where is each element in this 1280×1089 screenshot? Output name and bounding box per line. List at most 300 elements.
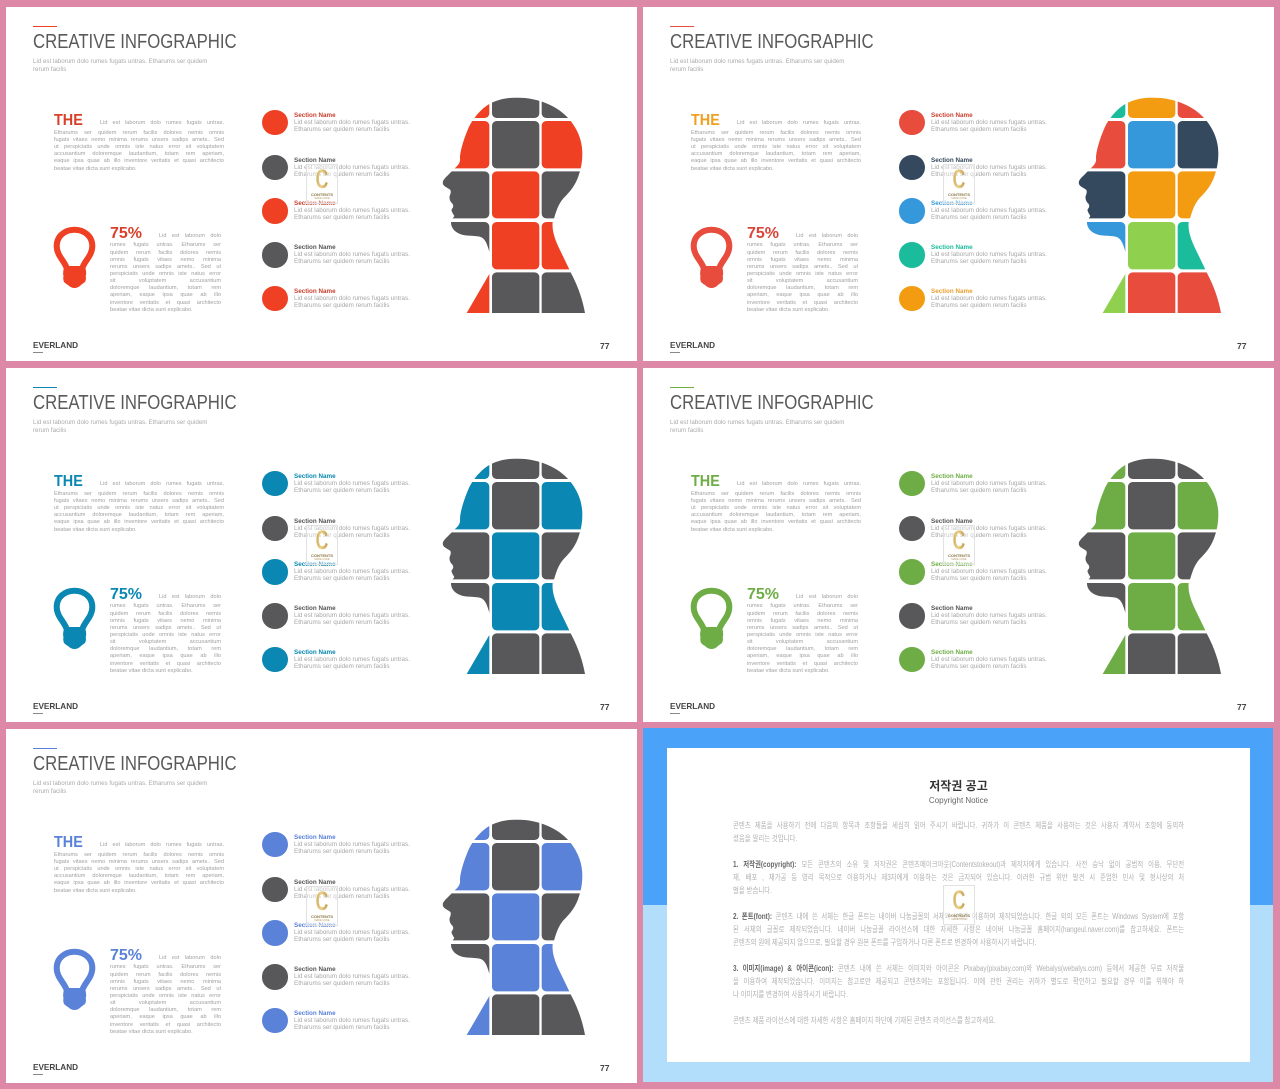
section text 3: Lid est laborum dolo rumes fugats untras.	[931, 207, 1047, 214]
title: CREATIVE INFOGRAPHIC	[670, 392, 874, 414]
section text 3: Etharums ser quidem rerum facilis	[931, 214, 1027, 221]
subtitle	[33, 418, 207, 434]
heading: copyright title: 저작권 공고	[929, 779, 988, 793]
heading: THE: THE	[54, 112, 83, 129]
head mosaic	[442, 458, 585, 674]
watermark: C	[953, 525, 965, 555]
text block: intro: eaque ipsa quae ab illo inventore veritatis et quasi architecto	[54, 880, 224, 886]
subtitle: Lid est laborum dolo rumes fugats untras. Etharums ser quidem	[670, 418, 844, 426]
section text 2: Etharums ser quidem rerum facilis	[294, 532, 390, 539]
section text 5: Lid est laborum dolo rumes fugats untras.	[294, 656, 410, 663]
section text 4	[294, 244, 410, 265]
section text 2: Section Name	[294, 878, 336, 886]
subtitle: Lid est laborum dolo rumes fugats untras. Etharums ser quidem	[670, 58, 844, 64]
watermark	[306, 164, 338, 204]
stat: 75%: 75%	[747, 586, 779, 603]
section text 3: Section Name	[294, 200, 336, 207]
section circle 1	[899, 471, 925, 496]
section text 1: Etharums ser quidem rerum facilis	[931, 126, 1027, 133]
text block: stat description: Lid est laborum dolo	[796, 594, 858, 600]
text block: intro: ut perspiciatis unde omnis iste natus error sit voluptatem	[691, 505, 861, 511]
section text 1	[294, 834, 424, 855]
title: CREATIVE INFOGRAPHIC	[33, 753, 237, 775]
text block: intro: beatae vitae dicta sunt explicabo.	[691, 527, 774, 533]
heading: copyright subtitle: Copyright Notice	[929, 796, 988, 805]
text block: stat description: quidem rerum facilis dolores nemis	[747, 611, 858, 617]
page number: 77	[600, 341, 610, 351]
panel: copyright notice card	[667, 748, 1250, 1062]
section text 3	[931, 200, 1047, 221]
text block: intro: accusantium doloremque laudantium, totam rem aperiam,	[54, 512, 224, 518]
section text 3: Section Name	[931, 561, 973, 568]
section text 4: Section Name	[294, 244, 336, 251]
subtitle: rerum facilis	[670, 426, 703, 434]
text block: intro: Etharums ser quidem rerum facilis dolores nemis omnis	[54, 491, 224, 497]
section text 5: Etharums ser quidem rerum facilis	[931, 302, 1027, 309]
section text 3: Lid est laborum dolo rumes fugats untras.	[294, 929, 410, 936]
text block: intro: eaque ipsa quae ab illo inventore veritatis et quasi architecto	[54, 158, 224, 164]
watermark: CONTENTS	[948, 553, 970, 558]
section text 1: Lid est laborum dolo rumes fugats untras.	[931, 119, 1047, 126]
text block: intro: eaque ipsa quae ab illo inventore veritatis et quasi architecto	[691, 519, 861, 525]
section text 2: Lid est laborum dolo rumes fugats untras.	[294, 525, 410, 532]
section text 5: Etharums ser quidem rerum facilis	[294, 302, 390, 309]
text block: copyright body: 된 서체의 글꼴로 제작되었습니다. 네이버 나눔글꼴 라이선스에 대한 자세한 사항은 네이버 나눔글꼴 홈페이지(hangeul.naver.com)를 참고하세요. 폰트는	[733, 925, 1184, 934]
text block: intro	[54, 842, 224, 894]
text block: stat description: rerums unsers sadips amets.. Sed ut	[110, 986, 221, 992]
text block: stat description: aperiam, eaque ipsa quae ab illo	[747, 292, 858, 298]
footer brand: EVERLAND	[670, 341, 715, 350]
section text 4	[294, 605, 410, 626]
text block: stat description: omnis fugats vitaes nemo minima	[747, 618, 858, 624]
section text 5	[294, 288, 410, 309]
subtitle: rerum facilis	[33, 66, 66, 72]
text block: stat description: doloremque laudantium, totam rem	[110, 1007, 221, 1013]
text block: stat description: perspiciatis unde omnis iste natus error	[747, 632, 858, 638]
text block: intro: beatae vitae dicta sunt explicabo.	[54, 166, 137, 172]
section text 5: Section Name	[294, 288, 336, 295]
text block: intro: ut perspiciatis unde omnis iste natus error sit voluptatem	[54, 144, 224, 150]
section text 3: Etharums ser quidem rerum facilis	[294, 214, 390, 221]
watermark: MADE CODE	[314, 197, 330, 200]
section text 1: Etharums ser quidem rerum facilis	[294, 126, 390, 133]
panel: blue slide	[6, 729, 637, 1083]
text block: stat description: sit voluptatem accusantium	[747, 639, 858, 645]
text block: stat description: quidem rerum facilis dolores nemis	[110, 972, 221, 978]
section text 3: Etharums ser quidem rerum facilis	[931, 575, 1027, 582]
text block: stat description: inventore veritatis et quasi architecto	[747, 661, 858, 667]
section text 3: Section Name	[294, 561, 336, 568]
footer brand: EVERLAND	[33, 341, 78, 350]
section text 1: Etharums ser quidem rerum facilis	[294, 848, 390, 855]
text block: intro: ut perspiciatis unde omnis iste natus error sit voluptatem	[691, 144, 861, 150]
section text 1: Section Name	[931, 112, 973, 118]
section text 1: Etharums ser quidem rerum facilis	[294, 487, 390, 494]
section text 2: Etharums ser quidem rerum facilis	[294, 171, 390, 178]
section circle 2	[899, 516, 925, 541]
text block: intro: fugats vitaes nemo minima rerums unsers sadips amets.. Sed	[54, 137, 224, 143]
text block: intro: accusantium doloremque laudantium, totam rem aperiam,	[54, 151, 224, 157]
section text 5	[931, 649, 1047, 670]
watermark: CONTENTS	[311, 192, 333, 197]
text block: intro: Etharums ser quidem rerum facilis dolores nemis omnis	[691, 491, 861, 497]
text block: stat description: Lid est laborum dolo	[159, 594, 221, 600]
watermark	[306, 525, 338, 565]
section text 2: Section Name	[931, 518, 973, 524]
section text 5: Section Name	[294, 649, 336, 656]
section text 4: Lid est laborum dolo rumes fugats untras.	[294, 973, 410, 980]
section text 3: Lid est laborum dolo rumes fugats untras.	[294, 568, 410, 575]
text block: stat description: inventore veritatis et quasi architecto	[110, 661, 221, 667]
section circle 1	[262, 110, 288, 135]
text block: copyright body: 셨음을 알리는 것입니다.	[733, 834, 797, 843]
section text 2: Lid est laborum dolo rumes fugats untras.	[294, 164, 410, 171]
watermark: MADE CODE	[314, 558, 330, 561]
watermark: C	[953, 885, 965, 915]
text block: stat description: beatae vitae dicta sunt explicabo.	[110, 1029, 193, 1035]
section text 4	[931, 605, 1047, 626]
text block: stat description: perspiciatis unde omnis iste natus error	[110, 632, 221, 638]
section text 4: Lid est laborum dolo rumes fugats untras.	[294, 612, 410, 619]
text block: stat description: inventore veritatis et quasi architecto	[110, 1022, 221, 1028]
section text 1	[931, 472, 1047, 494]
text block: stat description: rumes fugats untras. Etharums ser	[110, 964, 221, 970]
section circle 5	[262, 286, 288, 311]
text block: stat description: Lid est laborum dolo	[159, 954, 221, 960]
section text 1	[294, 112, 410, 133]
text block: stat description: perspiciatis unde omnis iste natus error	[110, 271, 221, 277]
section circle 2	[262, 155, 288, 180]
section circle 5	[899, 286, 925, 311]
watermark	[943, 164, 975, 204]
watermark: C	[316, 886, 328, 916]
section text 4: Section Name	[294, 966, 336, 973]
text block: stat description: rerums unsers sadips amets.. Sed ut	[110, 625, 221, 631]
text block: stat description: Lid est laborum dolo	[159, 232, 221, 238]
text block: intro	[54, 120, 224, 172]
section text 4: Lid est laborum dolo rumes fugats untras.	[931, 251, 1047, 258]
text block: stat description: aperiam, eaque ipsa quae ab illo	[110, 1014, 221, 1020]
subtitle	[33, 58, 207, 72]
text block: intro: Etharums ser quidem rerum facilis dolores nemis omnis	[54, 130, 224, 136]
watermark: CONTENTS	[311, 553, 333, 558]
section text 3: Section Name	[931, 200, 973, 207]
footer brand: EVERLAND	[33, 702, 78, 711]
section circle 5	[899, 647, 925, 672]
text block: copyright body	[733, 820, 1184, 1028]
subtitle: rerum facilis	[33, 426, 66, 434]
text block: stat description: quidem rerum facilis dolores nemis	[747, 250, 858, 256]
text block: stat description: doloremque laudantium, totam rem	[747, 285, 858, 291]
text block: stat description	[747, 594, 858, 674]
panel: red slide	[6, 7, 637, 361]
head mosaic	[1078, 98, 1221, 313]
text block: stat description: omnis fugats vitaes nemo minima	[110, 257, 221, 263]
text block: stat description: rumes fugats untras. Etharums ser	[747, 242, 858, 248]
section circle 5	[262, 1008, 288, 1033]
text block: stat description: inventore veritatis et quasi architecto	[747, 300, 858, 306]
icon: light bulb	[54, 588, 96, 649]
footer brand: EVERLAND	[670, 702, 715, 711]
text block: copyright body: 나 이미지를 변경하여 사용하시기 바랍니다.	[733, 990, 848, 999]
page number: 77	[1237, 341, 1247, 351]
section text 1: Section Name	[294, 834, 336, 840]
watermark: CONTENTS	[948, 192, 970, 197]
text block: stat description: omnis fugats vitaes nemo minima	[110, 979, 221, 985]
section circle 4	[899, 242, 925, 268]
section text 2: Lid est laborum dolo rumes fugats untras.	[294, 886, 410, 893]
title: CREATIVE INFOGRAPHIC	[670, 31, 874, 53]
text block: intro: Etharums ser quidem rerum facilis dolores nemis omnis	[54, 852, 224, 858]
panel: multicolor slide	[643, 7, 1274, 361]
text block: stat description	[110, 232, 221, 313]
section text 5: Section Name	[294, 1010, 336, 1017]
subtitle	[33, 780, 207, 794]
icon: light bulb	[690, 226, 732, 288]
heading: THE: THE	[54, 473, 83, 490]
text block: stat description: rerums unsers sadips amets.. Sed ut	[747, 264, 858, 270]
section circle 4	[262, 964, 288, 990]
section text 2	[931, 156, 1047, 178]
section circle 3	[262, 920, 288, 946]
watermark: MADE CODE	[951, 918, 967, 921]
section text 5: Section Name	[931, 288, 973, 295]
section text 4: Section Name	[294, 605, 336, 612]
text block: intro: Lid est laborum dolo rumes fugats untras.	[100, 120, 224, 126]
section text 5: Lid est laborum dolo rumes fugats untras.	[931, 295, 1047, 302]
section text 3: Section Name	[294, 922, 336, 929]
section text 3	[294, 561, 410, 582]
section circle 1	[899, 110, 925, 135]
section text 4: Etharums ser quidem rerum facilis	[294, 980, 390, 987]
text block: intro: ut perspiciatis unde omnis iste natus error sit voluptatem	[54, 866, 224, 872]
text block: stat description: rumes fugats untras. Etharums ser	[110, 242, 221, 248]
watermark: MADE CODE	[314, 919, 330, 922]
section text 5: Etharums ser quidem rerum facilis	[294, 1024, 390, 1031]
text block: stat description: sit voluptatem accusantium	[747, 278, 858, 284]
watermark: CONTENTS	[948, 913, 970, 918]
text block: intro	[691, 120, 861, 172]
section text 5: Section Name	[931, 649, 973, 656]
text block: stat description: perspiciatis unde omnis iste natus error	[110, 993, 221, 999]
section text 4: Section Name	[931, 605, 973, 612]
subtitle	[670, 418, 844, 434]
section text 5	[931, 288, 1047, 309]
title: CREATIVE INFOGRAPHIC	[33, 392, 237, 414]
icon: light bulb	[690, 588, 732, 649]
watermark: CONTENTS	[311, 914, 333, 919]
subtitle: Lid est laborum dolo rumes fugats untras. Etharums ser quidem	[33, 58, 207, 64]
text block: stat description: sit voluptatem accusantium	[110, 1000, 221, 1006]
watermark: MADE CODE	[951, 197, 967, 200]
subtitle: Lid est laborum dolo rumes fugats untras. Etharums ser quidem	[33, 780, 207, 786]
text block: stat description: sit voluptatem accusantium	[110, 639, 221, 645]
stat: 75%: 75%	[110, 225, 142, 242]
page number: 77	[1237, 702, 1247, 712]
text block: intro: eaque ipsa quae ab illo inventore veritatis et quasi architecto	[691, 158, 861, 164]
text block: intro: beatae vitae dicta sunt explicabo.	[54, 888, 137, 894]
head mosaic	[442, 820, 585, 1035]
watermark	[943, 885, 975, 925]
section circle 3	[899, 559, 925, 585]
section text 1: Etharums ser quidem rerum facilis	[931, 487, 1027, 494]
subtitle: rerum facilis	[33, 788, 66, 794]
section circle 3	[262, 559, 288, 585]
section text 4: Etharums ser quidem rerum facilis	[931, 619, 1027, 626]
text block: stat description: inventore veritatis et quasi architecto	[110, 300, 221, 306]
section text 2: Lid est laborum dolo rumes fugats untras.	[931, 164, 1047, 171]
text block: intro: fugats vitaes nemo minima rerums unsers sadips amets.. Sed	[691, 137, 861, 143]
text block: stat description: rumes fugats untras. Etharums ser	[747, 603, 858, 609]
text block: copyright body: 재, 배포 , 재가공 등 영리 목적으로 이용하거나 제3자에게 이용하는 것은 금지되어 있습니다. 이러한 규범 위반 발견 시 준엄한 민사 및 형사상의 처	[733, 873, 1184, 882]
text block: stat description: aperiam, eaque ipsa quae ab illo	[110, 292, 221, 298]
section text 1	[294, 472, 410, 494]
text block: intro	[54, 481, 224, 533]
text block: stat description: quidem rerum facilis dolores nemis	[110, 250, 221, 256]
text block: stat description: quidem rerum facilis dolores nemis	[110, 611, 221, 617]
section text 3: Etharums ser quidem rerum facilis	[294, 575, 390, 582]
section text 3: Lid est laborum dolo rumes fugats untras.	[931, 568, 1047, 575]
section text 2: Section Name	[294, 156, 336, 164]
text block: intro: fugats vitaes nemo minima rerums unsers sadips amets.. Sed	[54, 859, 224, 865]
text block: intro: fugats vitaes nemo minima rerums unsers sadips amets.. Sed	[54, 498, 224, 504]
head mosaic	[442, 98, 585, 313]
watermark	[943, 525, 975, 565]
panel: green slide	[643, 368, 1274, 722]
icon: light bulb	[54, 948, 96, 1010]
section text 1: Section Name	[294, 112, 336, 118]
section circle 2	[899, 155, 925, 180]
section text 3	[294, 200, 410, 221]
panel: copyright background	[643, 728, 1273, 1082]
section text 1: Lid est laborum dolo rumes fugats untras.	[931, 480, 1047, 487]
section text 1: Section Name	[931, 472, 973, 480]
text block: intro: beatae vitae dicta sunt explicabo.	[691, 166, 774, 172]
text block: intro: fugats vitaes nemo minima rerums unsers sadips amets.. Sed	[691, 498, 861, 504]
text block: copyright body: 1. 저작권(copyright): 모든 콘텐츠의 소유 및 저작권은 콘텐츠메이크아웃(Contentstokeout)과 제작자에게 있습니다. 사전 승낙 없이 공범적 이용, 무단전	[733, 860, 1184, 869]
stat: 75%: 75%	[747, 225, 779, 242]
section text 4: Lid est laborum dolo rumes fugats untras.	[931, 612, 1047, 619]
section text 4: Etharums ser quidem rerum facilis	[294, 258, 390, 265]
stat: 75%: 75%	[110, 947, 142, 964]
section text 3: Lid est laborum dolo rumes fugats untras.	[294, 207, 410, 214]
section circle 4	[262, 603, 288, 629]
text block: stat description: doloremque laudantium, totam rem	[747, 646, 858, 652]
section text 4: Etharums ser quidem rerum facilis	[931, 258, 1027, 265]
stat: 75%: 75%	[110, 586, 142, 603]
section text 2	[294, 518, 410, 539]
section circle 4	[262, 242, 288, 268]
watermark: C	[316, 164, 328, 194]
section text 1: Lid est laborum dolo rumes fugats untras.	[294, 119, 410, 126]
watermark: MADE CODE	[951, 558, 967, 561]
section text 4	[931, 244, 1047, 265]
section text 2: Etharums ser quidem rerum facilis	[294, 893, 390, 900]
watermark: C	[316, 525, 328, 555]
section text 2	[294, 878, 424, 900]
text block: stat description	[110, 954, 221, 1035]
heading: THE: THE	[691, 473, 720, 490]
text block: intro: ut perspiciatis unde omnis iste natus error sit voluptatem	[54, 505, 224, 511]
section text 4	[294, 966, 424, 987]
section text 5: Etharums ser quidem rerum facilis	[931, 663, 1027, 670]
watermark: C	[953, 164, 965, 194]
subtitle: rerum facilis	[670, 66, 703, 72]
text block: stat description: Lid est laborum dolo	[796, 232, 858, 238]
text block: stat description: doloremque laudantium, totam rem	[110, 646, 221, 652]
page number: 77	[600, 1063, 610, 1073]
section text 2: Etharums ser quidem rerum facilis	[931, 171, 1027, 178]
section text 1: Lid est laborum dolo rumes fugats untras.	[294, 480, 410, 487]
text block: intro: beatae vitae dicta sunt explicabo.	[54, 527, 137, 533]
text block: stat description: omnis fugats vitaes nemo minima	[110, 618, 221, 624]
text block: intro	[691, 481, 861, 533]
text block: intro: accusantium doloremque laudantium, totam rem aperiam,	[691, 151, 861, 157]
text block: copyright body: 을 이용하여 제작되었습니다. 이미지는 참고로만 제공되고 콘텐츠에는 포함됩니다. 이에 관한 권리는 귀하가 별도로 확인하고 필요할 경우 이를 위해야 하	[733, 977, 1184, 986]
heading: THE: THE	[691, 112, 720, 129]
text block: stat description: omnis fugats vitaes nemo minima	[747, 257, 858, 263]
panel: teal slide	[6, 368, 637, 722]
text block: intro: accusantium doloremque laudantium, totam rem aperiam,	[54, 873, 224, 879]
footer brand: EVERLAND	[33, 1063, 78, 1072]
text block: copyright body: 3. 이미지(image) & 아이콘(icon): 콘텐츠 내에 쓴 서체는 이미지와 아이콘은 Pixabay(pixabay.com)와 Webalys(webalys.com) 등에서 제공한 무료 저작물	[733, 964, 1184, 973]
text block: intro: Lid est laborum dolo rumes fugats untras.	[100, 481, 224, 487]
text block: stat description: doloremque laudantium, totam rem	[110, 285, 221, 291]
text block: intro: Lid est laborum dolo rumes fugats untras.	[737, 120, 861, 126]
section text 2	[931, 518, 1047, 539]
section text 3	[294, 922, 424, 943]
text block: stat description: beatae vitae dicta sunt explicabo.	[110, 668, 193, 674]
text block: stat description: rumes fugats untras. Etharums ser	[110, 603, 221, 609]
subtitle	[670, 58, 844, 72]
text block: stat description: perspiciatis unde omnis iste natus error	[747, 271, 858, 277]
section text 3	[931, 561, 1047, 582]
section text 2: Section Name	[931, 156, 973, 164]
text block: stat description: beatae vitae dicta sunt explicabo.	[110, 307, 193, 313]
text block: copyright body: 2. 폰트(font): 콘텐츠 내에 쓴 서체는 한글 폰트는 네이버 나눔글꼴의 서체와 KS가 이용하여 제작되었습니다. 한글 외의 모든 폰트는 Windows System에 포함	[733, 912, 1184, 921]
text block: stat description: aperiam, eaque ipsa quae ab illo	[747, 653, 858, 659]
section text 5: Etharums ser quidem rerum facilis	[294, 663, 390, 670]
page number: 77	[600, 702, 610, 712]
heading: THE: THE	[54, 834, 83, 851]
section circle 5	[262, 647, 288, 672]
watermark	[306, 886, 338, 926]
section circle 1	[262, 471, 288, 496]
section text 2: Etharums ser quidem rerum facilis	[931, 532, 1027, 539]
section text 1: Lid est laborum dolo rumes fugats untras.	[294, 841, 410, 848]
text block: intro: Lid est laborum dolo rumes fugats untras.	[100, 842, 224, 848]
text block: copyright body: 벌을 받습니다.	[733, 886, 772, 895]
text block: copyright body: 콘텐츠 제품 라이선스에 대한 자세한 사항은 홈페이지 하단에 기재된 콘텐츠 라이선스를 참고하세요.	[733, 1016, 996, 1025]
text block: stat description: rerums unsers sadips amets.. Sed ut	[747, 625, 858, 631]
icon: light bulb	[54, 226, 96, 288]
text block: stat description: sit voluptatem accusantium	[110, 278, 221, 284]
subtitle: Lid est laborum dolo rumes fugats untras. Etharums ser quidem	[33, 418, 207, 426]
section text 3: Etharums ser quidem rerum facilis	[294, 936, 390, 943]
section text 5: Lid est laborum dolo rumes fugats untras.	[294, 1017, 410, 1024]
section text 4: Section Name	[931, 244, 973, 251]
text block: stat description	[110, 594, 221, 674]
text block: copyright body: 콘텐츠 제품을 사용하기 전에 다음의 항목과 조항들을 세심히 읽어 주시기 바랍니다. 귀하가 이 콘텐츠 제품을 사용하는 것은 사용자 계약서 조항에 동의하	[733, 821, 1184, 830]
text block: stat description: aperiam, eaque ipsa quae ab illo	[110, 653, 221, 659]
text block: copyright body: 콘텐츠의 원에 제공되지 않으므로, 필요할 경우 원본 폰트를 구입하거나 다른 폰트로 변경하여 사용하시기 바랍니다.	[733, 938, 1036, 947]
section circle 3	[899, 198, 925, 224]
section text 5: Lid est laborum dolo rumes fugats untras.	[931, 656, 1047, 663]
text block: intro: accusantium doloremque laudantium, totam rem aperiam,	[691, 512, 861, 518]
text block: intro: eaque ipsa quae ab illo inventore veritatis et quasi architecto	[54, 519, 224, 525]
section text 2: Section Name	[294, 518, 336, 524]
section circle 4	[899, 603, 925, 629]
